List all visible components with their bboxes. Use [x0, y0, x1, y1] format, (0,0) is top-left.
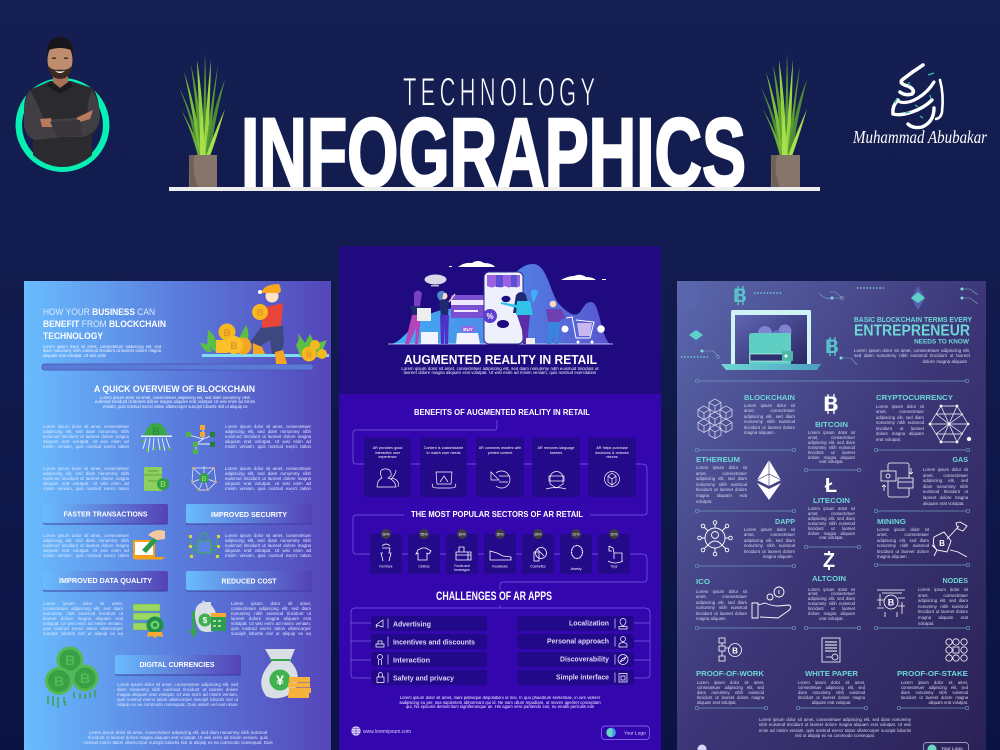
website globe — [698, 744, 706, 750]
term: nodes: NODES — [942, 576, 968, 585]
term: white paper: WHITE PAPER — [805, 669, 859, 678]
term: gas — [881, 455, 968, 507]
title: TECHNOLOGY — [403, 70, 599, 114]
illustration: laptop with wallet — [721, 310, 821, 370]
term: proof of work — [696, 638, 765, 706]
icon: mining dome — [141, 423, 172, 452]
term: litecoin: Lorem ipsum dolor sit amet, consectetuer adipiscing elit, sed diam nonummy nibh euismod tincidunt ut laoreet dolore magna aliquam erat volutpat. — [808, 507, 855, 540]
challenge: incentives — [371, 634, 487, 649]
card: clothes: Clothes — [418, 564, 430, 568]
term: ico — [696, 577, 791, 622]
heading: HOW YOUR BUSINESS CAN — [43, 307, 155, 317]
logo box — [602, 726, 650, 740]
banner: reduced cost: REDUCED COST — [222, 576, 277, 586]
icon: money bag and calculator: $ — [203, 616, 208, 625]
card: furniture — [370, 529, 402, 574]
term: proof of stake: Lorem ipsum dolor sit amet, consectetuer adipiscing elit, sed diam nonummy nibh euismod tincidunt ut laoreet dolore magna aliquam erat volutpat. — [901, 680, 968, 705]
term: bitcoin — [808, 393, 855, 467]
heading: sectors: THE MOST POPULAR SECTORS OF AR RETAIL — [411, 509, 583, 519]
challenge: advertising — [371, 616, 487, 631]
figure: woman with headset — [437, 291, 455, 344]
challenge: interaction: Interaction — [393, 656, 430, 664]
card: furniture: 60% — [382, 532, 390, 536]
term: cryptocurrency: Lorem ipsum dolor sit amet, consectetuer adipiscing elit, sed diam nonummy nibh euismod tincidunt ut laoreet dolore magna aliquam erat volutpat. — [876, 404, 924, 442]
term: bitcoin: Lorem ipsum dolor sit amet, consectetuer adipiscing elit, sed diam nonummy nibh euismod tincidunt ut laoreet dolore magna aliquam erat volutpat. — [808, 431, 855, 464]
illustration: miner with coins — [200, 284, 329, 364]
term: altcoin: Z — [823, 550, 835, 572]
term: dapp — [698, 517, 795, 560]
term: litecoin: Ł — [825, 475, 837, 497]
website: www.loremipsum.com — [363, 729, 411, 735]
icon: bitcoin cluster: B — [65, 652, 75, 668]
illustration: AR shopping scene — [388, 261, 613, 344]
card: footwears: 35% — [496, 532, 504, 536]
icon: bitcoin cluster: B — [54, 673, 64, 689]
card: jewelry — [560, 529, 592, 574]
term: proof of work: Lorem ipsum dolor sit amet, consectetuer adipiscing elit, sed diam nonummy nibh euismod tincidunt ut laoreet dolore magna aliquam erat volutpat. — [697, 680, 764, 705]
term: blockchain — [698, 393, 795, 438]
challenge: safety: Safety and privacy — [393, 674, 454, 682]
term: gas: GAS — [952, 455, 968, 464]
term: ethereum: Lorem ipsum dolor sit amet, consectetuer adipiscing elit, sed diam nonummy nibh euismod tincidunt ut laoreet dolore magna aliquam erat volutpat. — [696, 465, 747, 504]
card: benefit 1 — [364, 438, 411, 497]
term: dapp: Lorem ipsum dolor sit amet, consectetuer adipiscing elit, sed diam nonummy nibh euismod tincidunt ut laoreet dolore magna aliquam . — [744, 526, 795, 559]
card: benefit 3: AR connects readers with printed content — [479, 446, 521, 455]
card: benefit 5 — [588, 438, 636, 497]
dividers — [695, 379, 970, 710]
card: foods and beverages — [446, 529, 478, 574]
author portrait — [19, 37, 106, 170]
panel: blockchain business — [24, 281, 331, 750]
challenge: simple interface: Simple interface — [556, 672, 609, 682]
term: litecoin: LITECOIN — [813, 496, 850, 505]
card: benefit 2 — [420, 438, 467, 497]
illustration: AR shopping scene: BUY — [463, 327, 473, 332]
text: digital currencies: Lorem ipsum dolor sit amet, consectetuer adipiscing elit, sed diam nonummy nibh euismod tincidunt ut laoreet dolore magna aliquam erat volutpat. Ut wisi enim ad minim veniam, quis nostrud exerci tation ullamcorper suscipit lobortis nisl ut aliquip ex ea commodo consequat. Duis autem vel eum iriure — [117, 682, 238, 706]
card: benefit 1: AR provides good interactive user experience — [373, 446, 402, 459]
card: foods and beverages: 39% — [458, 532, 466, 536]
headline: BASIC BLOCKCHAIN TERMS EVERY — [854, 317, 972, 324]
logo box — [924, 742, 968, 750]
term: proof of work: PROOF-OF-WORK — [696, 669, 765, 678]
term: mining: Lorem ipsum dolor sit amet, consectetuer adipiscing elit, sed diam nonummy nibh euismod tincidunt ut laoreet dolore magna aliquam . — [877, 526, 929, 559]
illustration: miner with coins: B — [257, 308, 264, 318]
icon: yen money bag — [261, 649, 311, 698]
challenge: interaction — [371, 652, 487, 667]
headline: ENTREPRENEUR — [854, 322, 970, 340]
term: mining: B — [939, 539, 945, 548]
term: ico: ICO — [696, 577, 710, 586]
illustration: AR shopping scene: % — [486, 312, 494, 321]
challenge: incentives: Incentives and discounts — [393, 638, 475, 646]
term: bitcoin: B — [823, 393, 839, 416]
term: blockchain: Lorem ipsum dolor sit amet, consectetuer adipiscing elit, sed diam nonummy nibh euismod tincidunt ut laoreet dolore magna aliquam . — [744, 402, 795, 435]
figure: man with cart — [546, 301, 605, 344]
heading: BENEFIT FROM BLOCKCHAIN — [43, 319, 166, 329]
icon: mining dome: B — [152, 426, 160, 438]
decorations: coins and circuits — [681, 283, 978, 365]
heading: benefits: BENEFITS OF AUGMENTED REALITY IN RETAIL — [414, 407, 590, 417]
term: proof of stake: PROOF-OF-STAKE — [897, 669, 968, 678]
term: ethereum — [696, 455, 781, 505]
banner: digital currencies: DIGITAL CURRENCIES — [140, 660, 214, 669]
card: benefit 4: AR removes language barriers — [538, 446, 574, 455]
headline — [854, 317, 972, 346]
card: jewelry: 22% — [572, 532, 580, 536]
banner: improved data quality: IMPROVED DATA QUALITY — [59, 576, 152, 585]
icon: chain network — [186, 425, 215, 454]
term: dapp: DAPP — [775, 517, 795, 526]
panel: augmented reality in retail — [339, 246, 661, 750]
panel: blockchain terms — [677, 281, 986, 750]
heading: TECHNOLOGY — [43, 331, 103, 341]
term: mining: MINING — [877, 517, 906, 526]
icon: padlock circuit — [189, 533, 220, 558]
term: cryptocurrency — [876, 393, 971, 444]
challenge: localization: Localization — [569, 618, 609, 628]
term: white paper: Lorem ipsum dolor sit amet, consectetuer adipiscing elit, sed diam nonummy nibh euismod tincidunt ut laoreet dolore magna aliquam erat volutpat. — [798, 680, 865, 705]
term: nodes: Lorem ipsum dolor sit amet, consectetuer adipiscing elit, sed diam nonummy nibh euismod tincidunt ut laoreet dolore magna aliquam erat volutpat. — [918, 587, 968, 626]
card: cosmetics: Cosmetics — [530, 564, 546, 568]
banner: improved security: IMPROVED SECURITY — [211, 510, 287, 519]
plant left — [178, 53, 225, 188]
card: benefit 5: AR helps purchase decisions & reduces returns — [595, 446, 629, 459]
icon: wallet with coin: B — [160, 480, 166, 489]
banner: improved data quality — [43, 571, 168, 592]
logo box: Your Logo — [624, 730, 646, 736]
card: furniture: Furniture — [379, 564, 393, 568]
banner: digital currencies — [115, 655, 241, 676]
illustration: miner with coins: B — [230, 341, 238, 352]
card: benefit 3 — [476, 438, 524, 497]
card: benefit 4 — [532, 438, 580, 497]
term: proof of stake — [897, 639, 968, 706]
term: proof of work: B — [732, 646, 738, 656]
calligraphy — [893, 65, 943, 128]
challenge: discoverability — [517, 652, 634, 667]
headline: NEEDS TO KNOW — [914, 338, 969, 346]
shelf — [169, 187, 820, 191]
icon: bitcoin cluster: B — [80, 670, 90, 686]
term: ethereum: ETHEREUM — [696, 455, 740, 464]
body — [24, 81, 100, 170]
heading — [43, 307, 166, 341]
closing text: Lorem ipsum dolor sit amet, consectetuer adipiscing elit, sed diam nonummy nibh euismod tincidunt ut laoreet dolore magna aliquam erat volutpat. Ut wisi enim ad minim veniam, quis nostrud exerci tation ullamcorper suscipit lobortis nisl ut aliquip ex ea commodo consequat. — [759, 716, 911, 738]
card: clothes — [408, 529, 440, 574]
illustration: miner with coins: B — [306, 350, 312, 360]
card: clothes: 55% — [420, 532, 428, 536]
card: foods and beverages: Foods and — [454, 564, 470, 568]
banner: faster transactions: FASTER TRANSACTIONS — [64, 510, 148, 518]
term: altcoin: Lorem ipsum dolor sit amet, consectetuer adipiscing elit, sed diam nonummy nibh euismod tincidunt ut laoreet dolore magna aliquam erat volutpat. — [808, 588, 855, 621]
icon: money bag and calculator — [189, 600, 226, 638]
term: blockchain: BLOCKCHAIN — [744, 393, 795, 402]
icon: laptop payment — [132, 530, 165, 560]
card: footwears: Footwears — [492, 564, 508, 568]
banner: improved security — [186, 504, 312, 524]
signature — [852, 65, 988, 147]
card: toys — [598, 529, 630, 574]
section heading: A QUICK OVERVIEW OF BLOCKCHAIN — [94, 384, 255, 395]
card: toys: 20% — [610, 532, 618, 536]
term: litecoin — [808, 475, 855, 543]
icon: node sphere: B — [201, 476, 207, 483]
main title: AUGMENTED REALITY IN RETAIL — [404, 352, 597, 367]
teal ring — [19, 81, 106, 169]
term: altcoin — [808, 550, 855, 624]
card: cosmetics — [522, 529, 554, 574]
card: toys: Toys — [611, 564, 618, 568]
decorations: coins and circuits: B — [683, 285, 701, 312]
term: ico: Lorem ipsum dolor sit amet, consectetuer adipiscing elit, sed diam nonummy nibh euismod tincidunt ut laoreet dolore magna aliquam — [696, 588, 747, 621]
challenge: discoverability: Discoverability — [560, 654, 609, 664]
challenge: localization — [517, 616, 634, 631]
website — [351, 726, 411, 736]
term: nodes — [877, 576, 968, 627]
challenge: safety — [371, 670, 487, 685]
card: cosmetics: 28% — [534, 532, 542, 536]
decorations: coins and circuits: B — [733, 286, 747, 307]
plant right — [760, 53, 807, 188]
heading: challenges: CHALLENGES OF AR APPS — [436, 591, 552, 603]
ribbon — [42, 364, 313, 370]
challenge: simple interface — [517, 670, 634, 685]
card: foods and beverages: beverages — [454, 568, 470, 572]
banner: reduced cost — [186, 571, 312, 592]
icon: node sphere — [191, 466, 217, 491]
card: benefit 2: Content is customizable to match user needs — [424, 446, 463, 455]
connector lines — [351, 420, 650, 678]
icon: bitcoin cluster — [45, 646, 98, 708]
term: bitcoin: BITCOIN — [815, 420, 848, 429]
banner: faster transactions — [43, 504, 168, 524]
card: footwears — [484, 529, 516, 574]
challenge: personal approach — [517, 634, 634, 649]
challenge: advertising: Advertising — [393, 620, 431, 628]
title: INFOGRAPHICS — [241, 98, 746, 207]
figure: woman with parcel — [405, 290, 431, 344]
card: jewelry: Jewelry — [570, 567, 582, 571]
intro text: Lorem ipsum dolor sit amet, consectetuer adipiscing elit, sed diam nonummy nibh euismod tincidunt ut laoreet dolore magna aliquam . — [854, 348, 970, 364]
term: cryptocurrency: CRYPTOCURRENCY — [876, 393, 953, 402]
title — [241, 70, 746, 207]
term: white paper — [798, 638, 865, 706]
head — [53, 72, 68, 88]
term: gas: Lorem ipsum dolor sit amet, consectetuer adipiscing elit, sed diam nonummy nibh euismod tincidunt ut laoreet dolore magna aliquam erat volutpat. — [923, 467, 968, 506]
decorations: coins and circuits: B — [825, 337, 839, 358]
icon: wallet with coin — [144, 467, 169, 491]
icon: server with badge — [133, 604, 164, 638]
challenge: personal approach: Personal approach — [547, 636, 609, 646]
term: nodes: B — [888, 598, 895, 608]
term: mining — [877, 517, 967, 560]
figure: woman pointing at phone — [501, 292, 535, 344]
term: altcoin: ALTCOIN — [812, 574, 846, 583]
icon: yen money bag: ¥ — [276, 672, 284, 688]
illustration: miner with coins: B — [223, 328, 231, 339]
